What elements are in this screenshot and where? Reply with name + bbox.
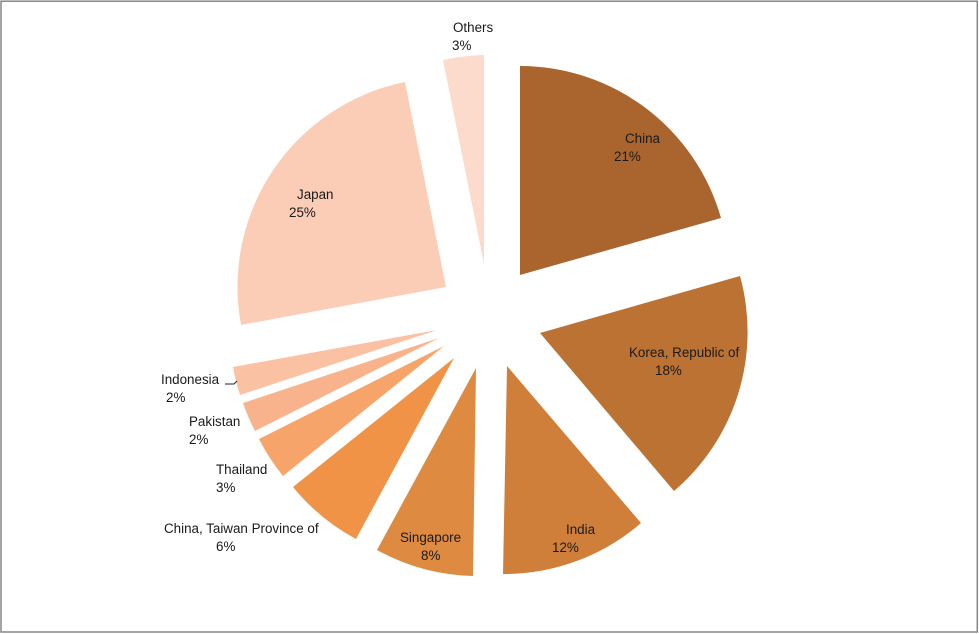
slice: Indonesia 2% — [161, 330, 437, 405]
slice: India 12% — [503, 366, 641, 574]
slice: Thailand 3% — [216, 346, 444, 495]
slice: Pakistan 2%: Pakistan — [189, 414, 240, 429]
slice: Korea, Republic of 18%: 18% — [655, 363, 682, 378]
slice: Japan 25% — [237, 82, 446, 325]
slice: China 21%: 21% — [614, 149, 641, 164]
slice: Thailand 3%: Thailand — [216, 462, 267, 477]
slice: Korea, Republic of 18% — [540, 276, 748, 491]
slice: China, Taiwan Province of 6%: 6% — [216, 539, 235, 554]
slice: Singapore 8%: Singapore — [400, 530, 461, 545]
slice: China, Taiwan Province of 6%: China, Taiwan Province of — [164, 521, 319, 536]
slice: Japan 25%: Japan — [297, 187, 333, 202]
slice: Korea, Republic of 18%: Korea, Republic of — [629, 345, 739, 360]
slice: Pakistan 2% — [189, 338, 439, 447]
slice: Others 3%: 3% — [452, 38, 471, 53]
slice: China, Taiwan Province of 6% — [164, 358, 454, 554]
slice: China 21% — [520, 66, 721, 275]
slice: China 21%: China — [625, 131, 661, 146]
slice: India 12%: India — [566, 522, 596, 537]
slice: Others 3%: Others — [453, 20, 493, 35]
slice: Singapore 8%: 8% — [421, 548, 440, 563]
slice: Thailand 3%: 3% — [216, 480, 235, 495]
slice: Pakistan 2%: 2% — [189, 432, 208, 447]
slice: Indonesia 2%: 2% — [166, 390, 185, 405]
slice: Singapore 8% — [377, 368, 476, 576]
slice: India 12%: 12% — [552, 540, 579, 555]
slice: Others 3% — [443, 20, 493, 264]
slice: Japan 25%: 25% — [289, 205, 316, 220]
slice: Indonesia 2%: Indonesia — [161, 372, 220, 387]
